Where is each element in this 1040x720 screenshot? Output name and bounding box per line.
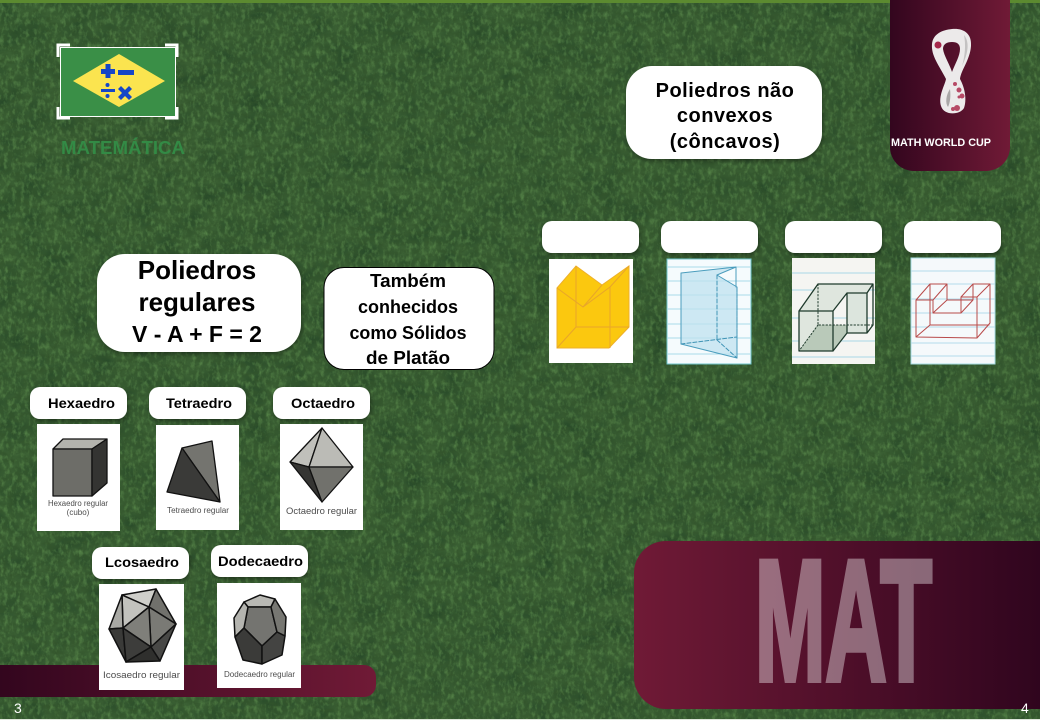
- label: Tetraedro: Tetraedro: [166, 395, 232, 411]
- page number 3: 3: [14, 700, 22, 716]
- figure: octahedron: Octaedro regular: [286, 506, 357, 516]
- heading: Poliedros não convexos: [626, 66, 822, 159]
- figure: octahedron: [280, 424, 363, 530]
- label: Icosaedro: [92, 547, 189, 579]
- bottom right panel: [634, 525, 1040, 717]
- blank label 3: [785, 221, 882, 253]
- heading: Poliedros regulares: V - A + F = 2: [132, 321, 262, 347]
- label: Octaedro: [273, 387, 370, 419]
- label: Dodecaedro: Dodecaedro: [218, 553, 303, 569]
- callout: Sólidos de Platão: de Platão: [366, 348, 450, 368]
- label: Icosaedro: Lcosaedro: [105, 554, 179, 570]
- figure: icosahedron: [99, 584, 184, 690]
- heading: Poliedros regulares: regulares: [138, 287, 256, 317]
- callout: Sólidos de Platão: conhecidos: [358, 297, 458, 317]
- heading: Poliedros não convexos: convexos: [677, 105, 773, 127]
- label: Octaedro: Octaedro: [291, 395, 355, 411]
- label: Tetraedro: [149, 387, 246, 419]
- callout: Sólidos de Platão: Também: [370, 271, 446, 291]
- label: Dodecaedro: [211, 545, 308, 577]
- page number 4: 4: [1021, 700, 1029, 716]
- heading: Poliedros não convexos: Poliedros não: [656, 80, 794, 102]
- icon: World Cup emblem: [932, 29, 971, 113]
- heading: Poliedros regulares: Poliedros: [138, 255, 256, 285]
- logo: math flag: [58, 45, 177, 118]
- label: Hexaedro: Hexaedro: [48, 395, 115, 411]
- panel title: MATH WORLD CUP: [891, 137, 991, 149]
- logo caption: Matemática: MATEMÁTICA: [61, 137, 185, 158]
- figure: blue concave prism: [667, 259, 751, 364]
- blank label 4: [904, 221, 1001, 253]
- callout: Sólidos de Platão: como Sólidos: [350, 323, 466, 343]
- blank label 2: [661, 221, 758, 253]
- figure: tetrahedron: Tetraedro regular: [167, 506, 229, 515]
- blank label 1: [542, 221, 639, 253]
- figure: dodecahedron: Dodecaedro regular: [224, 670, 295, 679]
- figure: yellow concave prism: [549, 259, 633, 363]
- bottom left bar: [0, 665, 376, 697]
- figure: cube: Hexaedro regular: [48, 499, 108, 508]
- heading: Poliedros não convexos: (côncavos): [670, 131, 780, 153]
- heading: Poliedros regulares: [97, 254, 301, 352]
- figure: cube: [37, 424, 120, 531]
- figure: green concave block: [792, 258, 875, 364]
- figure: cube: (cubo): [67, 508, 90, 517]
- callout: Sólidos de Platão: [324, 268, 494, 370]
- figure: dodecahedron: [217, 583, 301, 688]
- figure: tetrahedron: [156, 425, 239, 530]
- label: Hexaedro: [30, 387, 127, 419]
- figure: icosahedron: Icosaedro regular: [103, 670, 180, 680]
- figure: red concave U block: [911, 258, 995, 364]
- panel: Math World Cup: [890, 0, 1010, 171]
